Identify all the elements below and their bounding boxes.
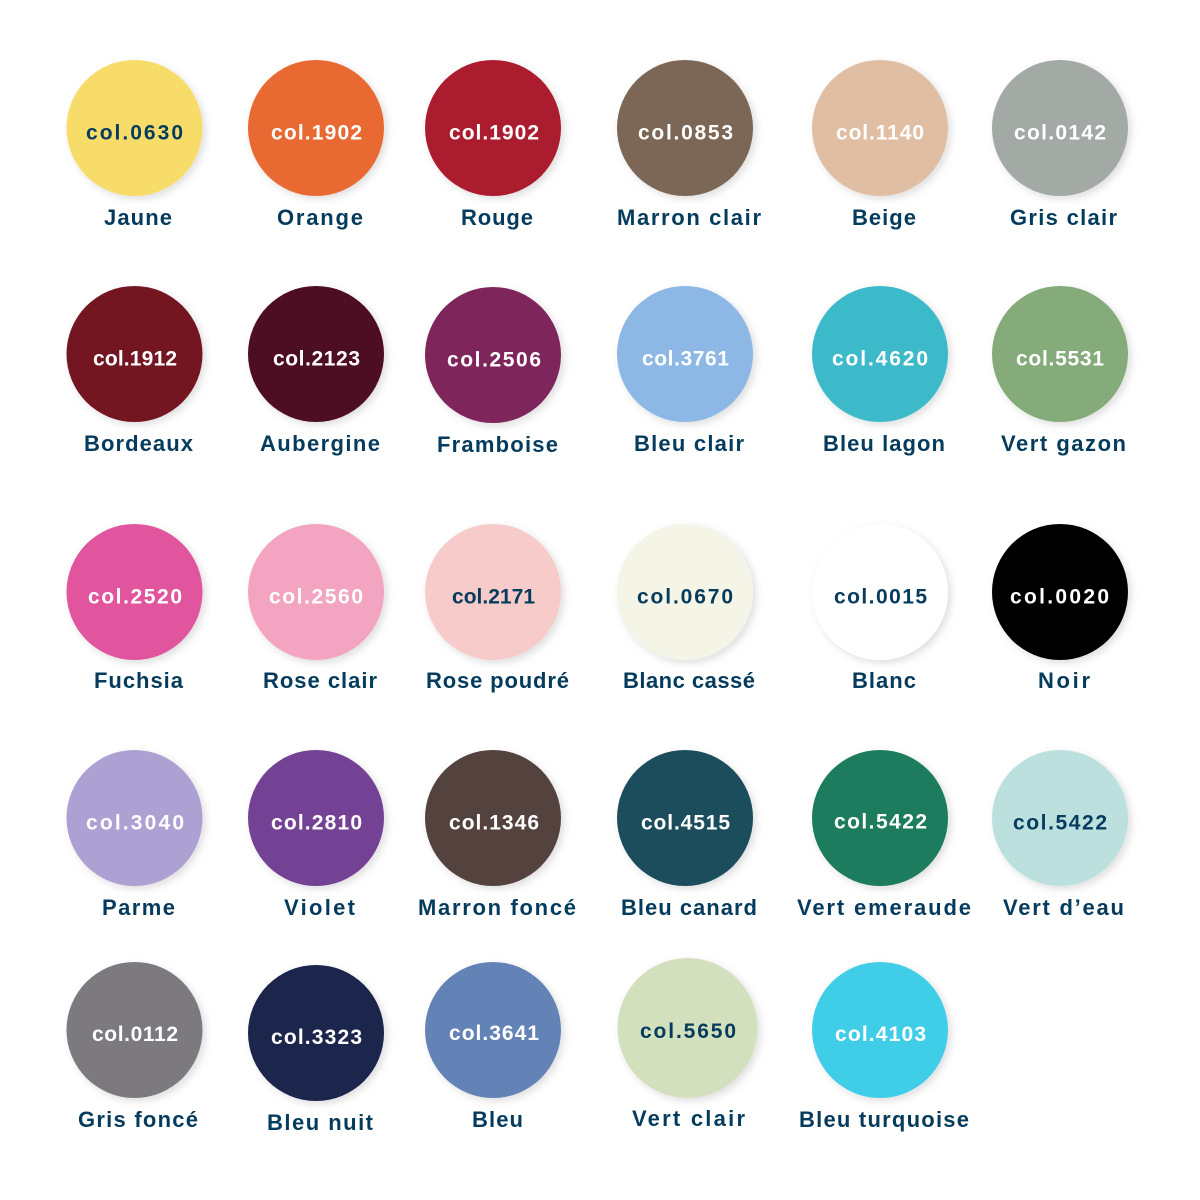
swatch: Vert d'eau xyxy=(992,750,1128,920)
swatch: Vert clair: Vert clair xyxy=(632,1106,745,1131)
swatch: Bleu clair: Bleu clair xyxy=(634,431,744,456)
swatch: Vert d'eau: Vert d’eau xyxy=(1003,895,1124,920)
swatch: Orange: Orange xyxy=(277,205,363,230)
swatch: Framboise xyxy=(425,287,561,457)
swatch: Bleu turquoise xyxy=(799,962,969,1132)
swatch: Bleu canard xyxy=(617,750,757,920)
swatch: Framboise: Framboise xyxy=(437,432,558,457)
swatch: Gris clair: Gris clair xyxy=(1010,205,1117,230)
swatch: Bleu lagon: col.4620 xyxy=(832,348,928,370)
swatch: Violet: Violet xyxy=(284,895,356,920)
swatch: Bordeaux: col.1912 xyxy=(93,348,177,370)
swatch: Marron clair: col.0853 xyxy=(638,122,733,144)
swatch: Vert gazon xyxy=(992,286,1128,456)
swatch: Bleu: col.3641 xyxy=(449,1022,539,1045)
swatch: Vert emeraude xyxy=(797,750,971,920)
swatch: Vert d'eau: col.5422 xyxy=(1013,812,1107,834)
swatch: Violet: col.2810 xyxy=(271,812,362,834)
swatch: Blanc: col.0015 xyxy=(834,586,927,608)
swatch: Marron foncé xyxy=(418,750,576,920)
swatch: Bleu canard: col.4515 xyxy=(641,812,730,834)
swatch: Bleu nuit: col.3323 xyxy=(271,1026,362,1049)
swatch: Vert clair: col.5650 xyxy=(640,1020,736,1043)
swatch: Beige xyxy=(812,60,948,230)
swatch: Blanc cassé: Blanc cassé xyxy=(623,668,755,693)
swatch: Rouge: col.1902 xyxy=(449,122,539,144)
swatch: Vert emeraude: Vert emeraude xyxy=(797,895,971,920)
swatch: Marron clair: Marron clair xyxy=(617,205,761,230)
swatch: Rouge xyxy=(425,60,561,230)
swatch: Rose clair: col.2560 xyxy=(269,586,363,608)
swatch: Bleu lagon: Bleu lagon xyxy=(823,431,945,456)
swatch: Vert emeraude: col.5422 xyxy=(834,810,927,834)
swatch: Fuchsia: Fuchsia xyxy=(94,668,184,693)
swatch: Fuchsia: col.2520 xyxy=(88,586,182,608)
swatch: Vert clair xyxy=(618,958,758,1131)
swatch: Beige: col.1140 xyxy=(836,122,924,144)
swatch: Marron foncé: col.1346 xyxy=(449,812,539,834)
swatch: Gris foncé xyxy=(66,962,202,1132)
swatch: Blanc cassé: col.0670 xyxy=(637,586,733,608)
swatch: Orange xyxy=(248,60,384,230)
swatch: Fuchsia xyxy=(66,524,202,693)
swatch: Marron foncé: Marron foncé xyxy=(418,895,576,920)
swatch: Jaune: Jaune xyxy=(104,205,172,230)
swatch: Bleu clair: col.3761 xyxy=(642,348,729,370)
swatch: Parme xyxy=(66,750,202,920)
swatch: Gris foncé: Gris foncé xyxy=(78,1107,198,1132)
swatch: Marron clair xyxy=(617,60,761,230)
swatch: Gris clair: col.0142 xyxy=(1014,122,1106,144)
swatch: Noir: col.0020 xyxy=(1010,586,1109,608)
swatch: Parme: Parme xyxy=(102,895,175,920)
swatch: Orange: col.1902 xyxy=(271,122,362,144)
swatch: Bordeaux xyxy=(66,286,202,456)
swatch: Jaune xyxy=(66,60,202,230)
swatch: Aubergine: col.2123 xyxy=(273,348,360,370)
swatch: Blanc xyxy=(812,524,948,693)
swatch: Aubergine xyxy=(248,286,384,456)
swatch: Violet xyxy=(248,750,384,920)
swatch: Beige: Beige xyxy=(852,205,916,230)
swatch: Aubergine: Aubergine xyxy=(260,431,380,456)
swatch: Rose poudré: col.2171 xyxy=(452,586,535,608)
swatch: Rouge: Rouge xyxy=(461,205,533,230)
swatch: Bleu: Bleu xyxy=(472,1107,523,1132)
swatch: Vert gazon: Vert gazon xyxy=(1001,431,1126,456)
swatch: Bleu turquoise: Bleu turquoise xyxy=(799,1107,969,1132)
swatch: Gris clair xyxy=(992,60,1128,230)
swatch: Bleu clair xyxy=(617,286,753,456)
swatch: Gris foncé: col.0112 xyxy=(92,1023,178,1046)
swatch: Blanc: Blanc xyxy=(852,668,916,693)
swatch: Vert gazon: col.5531 xyxy=(1016,348,1104,370)
swatch: Rose poudré: Rose poudré xyxy=(426,668,569,693)
swatch: Noir: Noir xyxy=(1038,668,1090,693)
swatch: Rose clair xyxy=(248,524,384,693)
swatch: Rose clair: Rose clair xyxy=(263,668,377,693)
swatch: Bleu nuit: Bleu nuit xyxy=(267,1110,374,1135)
swatch: Framboise: col.2506 xyxy=(447,348,541,372)
swatch: Bleu turquoise: col.4103 xyxy=(835,1023,926,1046)
swatch: Bordeaux: Bordeaux xyxy=(84,431,194,456)
swatch: Blanc cassé xyxy=(617,524,755,693)
swatch: Rose poudré xyxy=(425,524,569,693)
swatch: Parme: col.3040 xyxy=(86,812,184,834)
swatch: Jaune: col.0630 xyxy=(86,122,183,144)
swatch: Bleu xyxy=(425,962,561,1132)
swatch: Bleu canard: Bleu canard xyxy=(621,895,757,920)
swatch: Noir xyxy=(992,524,1128,693)
swatch: Bleu lagon xyxy=(812,286,948,456)
swatch: Bleu nuit xyxy=(248,965,384,1135)
